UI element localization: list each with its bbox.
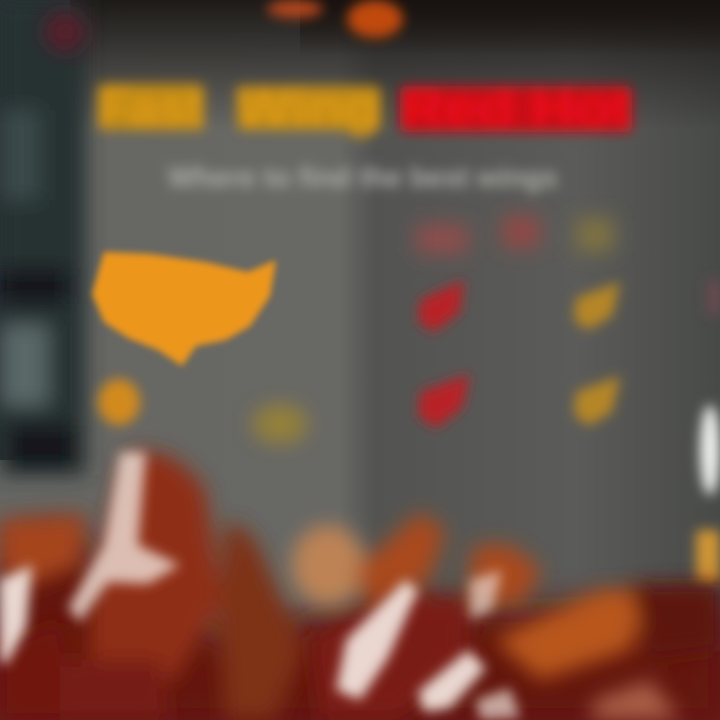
title xyxy=(98,78,632,138)
icons: red column xyxy=(418,280,470,428)
food: left wing pieces xyxy=(0,452,305,720)
map: Alaska xyxy=(98,379,140,425)
dark red mark at top left xyxy=(45,12,85,52)
title: Red Hot xyxy=(400,78,632,138)
icons: orange column xyxy=(574,282,620,426)
table column headers xyxy=(416,216,614,254)
title: Fast xyxy=(98,78,204,138)
map: Hawaii xyxy=(252,404,308,444)
right edge highlights xyxy=(696,280,720,584)
food: centre and right wing pieces xyxy=(292,512,720,720)
highlights: white glints xyxy=(0,452,520,720)
map: United States xyxy=(92,252,276,366)
hand and food foreground xyxy=(0,452,720,720)
title: Wing xyxy=(236,78,380,138)
panel: dark left edge xyxy=(0,0,86,475)
top orange glow xyxy=(267,0,403,38)
food: dark red base xyxy=(0,530,720,720)
subtitle: Where to find the best wings xyxy=(168,162,558,194)
